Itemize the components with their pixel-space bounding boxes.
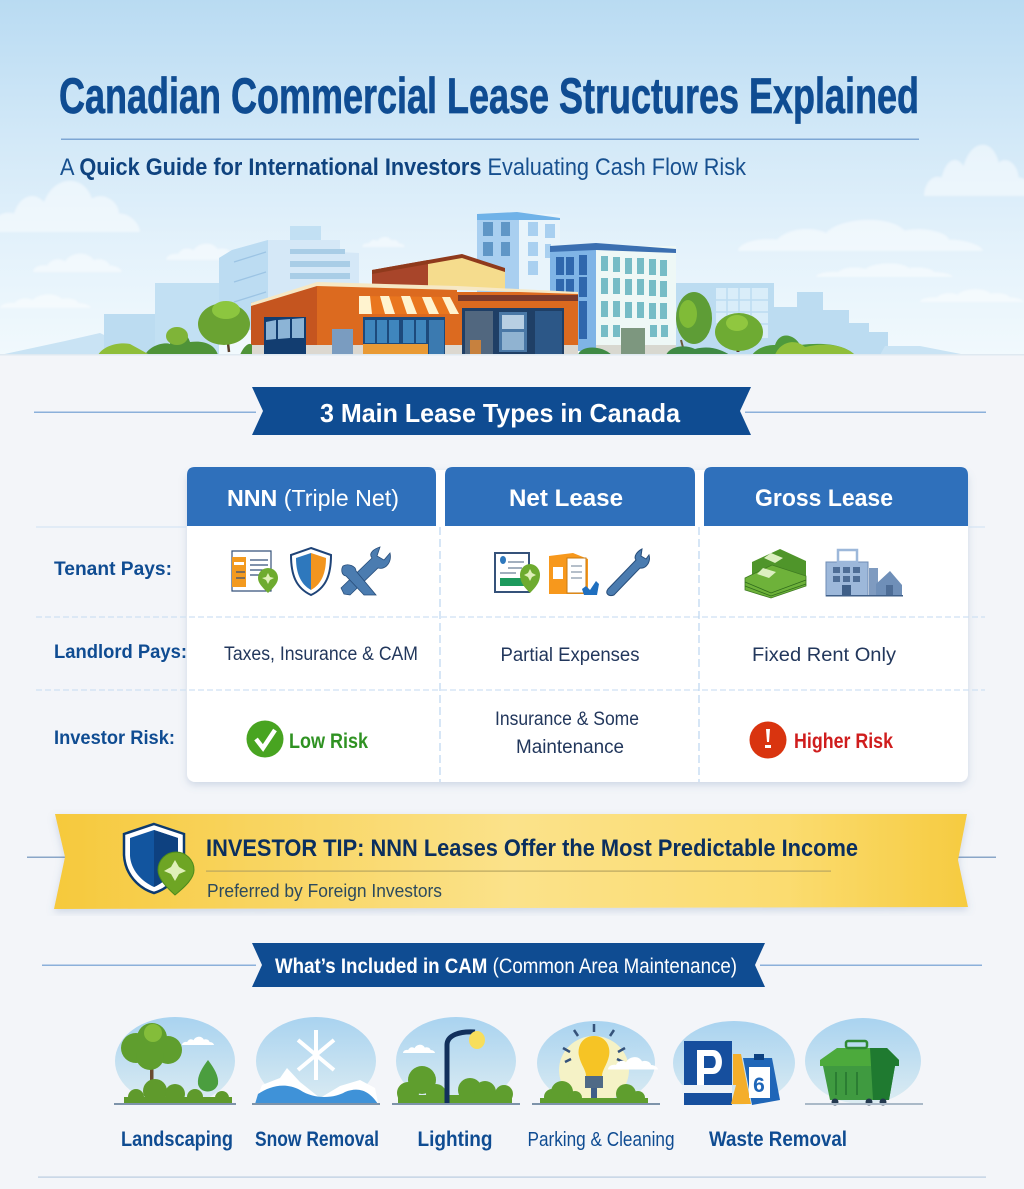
icon: NNN wrench bbox=[341, 547, 390, 595]
badge: low risk: Low Risk bbox=[289, 730, 368, 753]
distant buildings bbox=[0, 283, 966, 355]
CAM label: Parking and Cleaning: Parking & Cleaning bbox=[528, 1129, 674, 1151]
icon: buildings bbox=[826, 550, 903, 596]
right roller doors bbox=[462, 308, 564, 355]
icon: NNN shield bbox=[291, 548, 331, 595]
section heading: CAM: What’s Included in CAM (Common Area Maintenance) bbox=[275, 955, 737, 978]
badge: higher risk: Higher Risk bbox=[794, 730, 893, 753]
section heading: lease types bbox=[34, 387, 986, 435]
row label: Landlord Pays: Landlord Pays: bbox=[54, 642, 187, 663]
section heading: CAM bbox=[42, 943, 982, 987]
cell: investor risk Net: Insurance & Some bbox=[495, 709, 639, 730]
store door and window bbox=[363, 317, 445, 355]
icon: NNN document bbox=[232, 551, 278, 593]
CAM label: Landscaping: Landscaping bbox=[121, 1128, 233, 1151]
column header: NNN bbox=[187, 467, 436, 526]
CAM icon: parking sign bbox=[673, 1021, 795, 1105]
bottom rule bbox=[38, 1176, 986, 1178]
tip heading: INVESTOR TIP: NNN Leases Offer the Most Predictable Income bbox=[206, 835, 858, 862]
large office tower bbox=[219, 226, 359, 330]
section heading: lease types: 3 Main Lease Types in Canada bbox=[320, 398, 681, 428]
CAM label: Waste Removal: Waste Removal bbox=[709, 1128, 847, 1151]
ground edge bbox=[0, 354, 1024, 356]
CAM icon: landscaping bbox=[114, 1017, 236, 1105]
row label: Investor Risk: Investor Risk: bbox=[54, 728, 175, 749]
subtitle: A Quick Guide for International Investors Evaluating Cash Flow Risk bbox=[60, 154, 747, 181]
CAM icon: lighting bbox=[392, 1017, 520, 1105]
awning bbox=[359, 296, 459, 314]
investor tip banner bbox=[27, 814, 996, 909]
cell: landlord pays Gross: Fixed Rent Only bbox=[752, 645, 897, 666]
row label: Tenant Pays: Tenant Pays: bbox=[54, 559, 172, 580]
CAM label: Lighting: Lighting bbox=[418, 1128, 492, 1151]
CAM icon: parking and cleaning light bbox=[532, 1021, 660, 1105]
icon: Net wrench bbox=[607, 549, 649, 596]
table card bbox=[187, 470, 968, 782]
icon: shield with badge bbox=[124, 824, 194, 895]
CAM label: Snow Removal: Snow Removal bbox=[255, 1128, 379, 1151]
cell: investor risk Net bbox=[495, 709, 639, 758]
store left garage bbox=[264, 317, 306, 355]
clouds bbox=[0, 145, 1024, 308]
column header: NNN: NNN (Triple Net) bbox=[227, 485, 399, 511]
store gable bbox=[372, 254, 505, 290]
tall building bbox=[477, 212, 560, 304]
cell: landlord pays Net: Partial Expenses bbox=[500, 645, 640, 666]
tip subtext: Preferred by Foreign Investors bbox=[207, 881, 442, 901]
column header: Net Lease bbox=[445, 467, 695, 526]
skyline illustration bbox=[0, 212, 1024, 356]
icon: Net folder bbox=[549, 553, 599, 595]
brick store bbox=[251, 282, 578, 355]
column header: Gross Lease bbox=[704, 467, 968, 526]
column header: Net Lease: Net Lease bbox=[509, 485, 623, 512]
CAM icon: parking sign: 6 bbox=[753, 1074, 765, 1097]
tip rule bbox=[206, 870, 831, 872]
badge: low risk bbox=[246, 720, 368, 758]
mid blue building bbox=[550, 243, 676, 355]
title rule bbox=[61, 138, 919, 140]
cell: investor risk Net: Maintenance bbox=[516, 737, 624, 758]
header sky bbox=[0, 0, 1024, 355]
lease comparison table bbox=[36, 467, 985, 782]
icon: cash stacks bbox=[745, 549, 806, 598]
distant office window grid bbox=[716, 288, 768, 338]
cell: landlord pays NNN: Taxes, Insurance & CAM bbox=[224, 644, 418, 665]
icon: Net document bbox=[495, 553, 540, 593]
CAM icon: waste bin bbox=[805, 1018, 923, 1106]
trees and shrubs bbox=[98, 292, 855, 355]
column header: Gross Lease: Gross Lease bbox=[755, 485, 893, 512]
badge: higher risk bbox=[750, 722, 893, 758]
CAM icon: snow removal bbox=[252, 1017, 380, 1105]
